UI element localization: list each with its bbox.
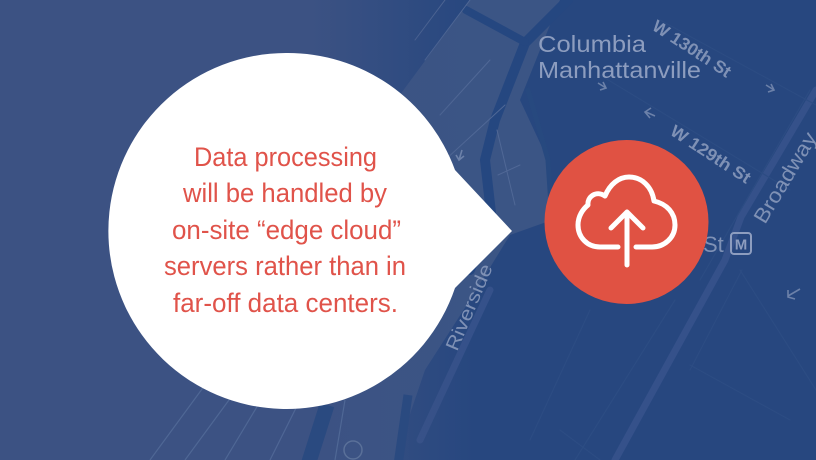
icon: cloud upload (544, 140, 708, 304)
map arrows (456, 82, 800, 299)
map label: Columbia Manhattanville (538, 31, 701, 83)
speech bubble text: far-off data centers. (173, 288, 398, 318)
map street labels: W 130th St (649, 16, 735, 82)
map label: Columbia Manhattanville: Columbia (538, 31, 647, 57)
speech bubble text: on-site “edge cloud” (172, 215, 401, 245)
speech bubble (108, 53, 512, 409)
map street labels: St (703, 232, 724, 257)
map street labels: Broadway (750, 128, 816, 228)
speech bubble text: will be handled by (182, 178, 388, 208)
map label: Columbia Manhattanville: Manhattanville (538, 57, 701, 83)
speech bubble text: Data processing (194, 142, 377, 172)
speech bubble text: servers rather than in (164, 251, 406, 281)
subway marker: M (735, 236, 747, 254)
speech bubble text (164, 142, 406, 318)
map street labels: Riverside (442, 261, 498, 354)
map street labels: W 129th St (667, 121, 755, 188)
map street labels (442, 16, 816, 354)
subway marker (731, 233, 751, 254)
